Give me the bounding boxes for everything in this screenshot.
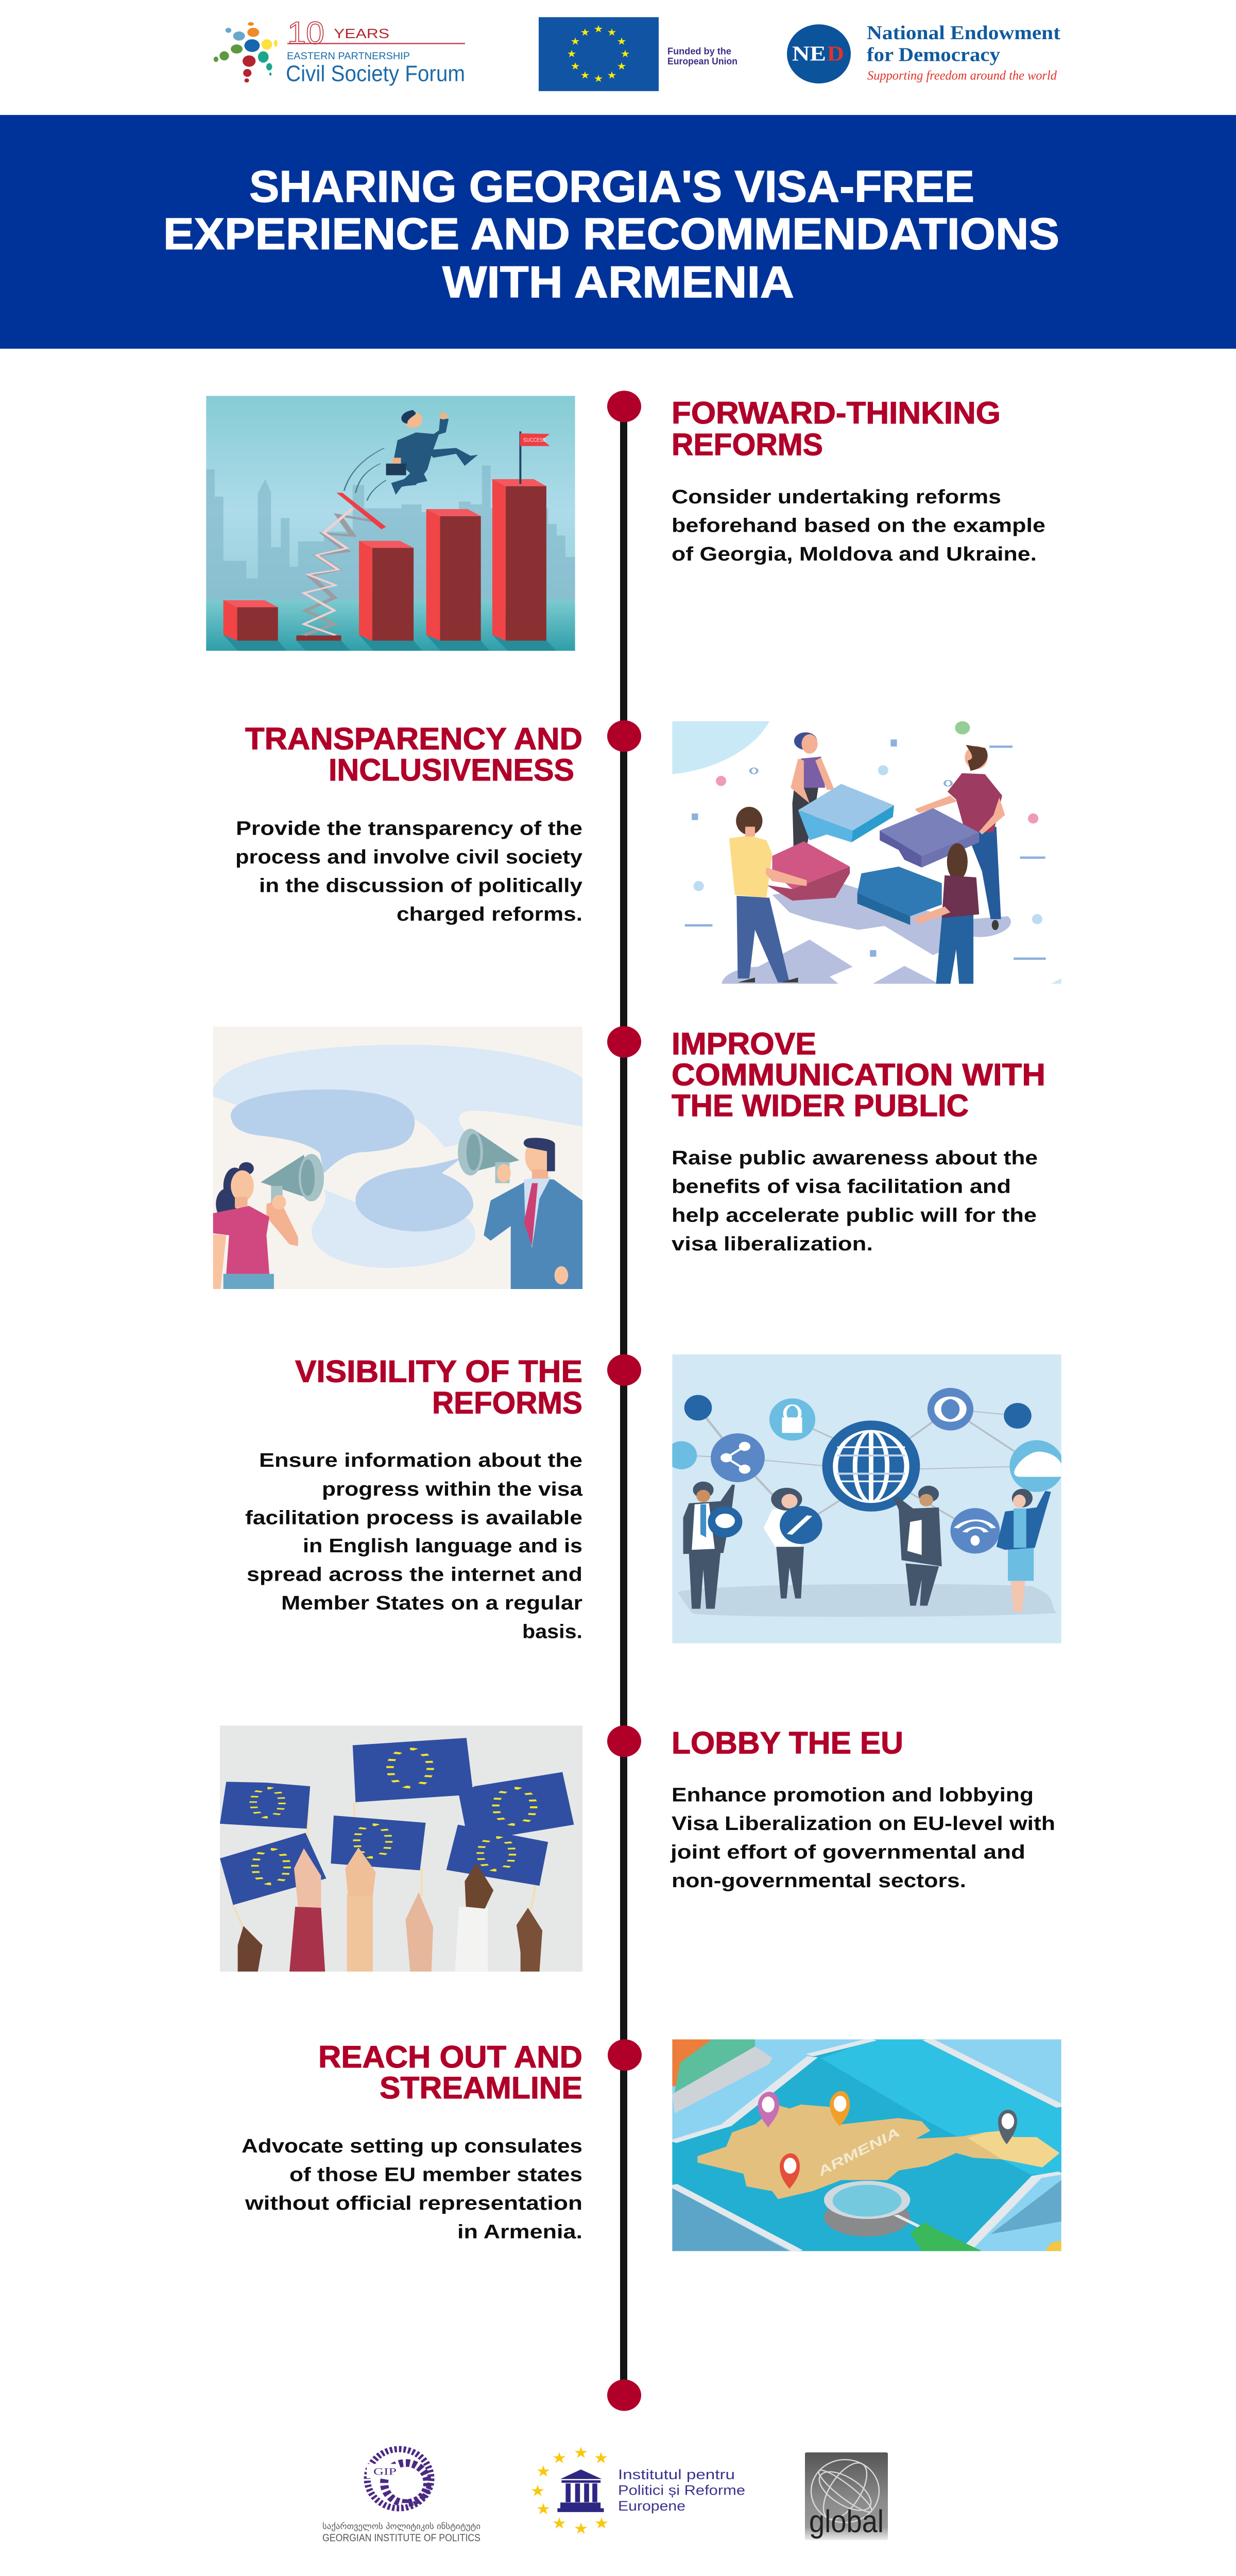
title banner bbox=[0, 115, 1236, 349]
text block: spread across the internet and bbox=[247, 1564, 582, 1585]
footer logos bbox=[322, 2447, 888, 2544]
logo: EaP Civil Society Forum 10 years: EASTERN PARTNERSHIP bbox=[287, 50, 410, 62]
text block: of Georgia, Moldova and Ukraine. bbox=[672, 543, 1037, 565]
text block: non-governmental sectors. bbox=[672, 1870, 966, 1892]
text block: Provide the transparency of the bbox=[236, 818, 582, 839]
logo: Georgian Institute of Politics: საქართველოს პოლიტიკის ინსტიტუტი bbox=[322, 2521, 480, 2532]
text block: joint effort of governmental and bbox=[670, 1841, 1025, 1863]
heading: REACH OUT AND bbox=[318, 2040, 582, 2074]
heading bbox=[318, 2040, 582, 2106]
logo: EU flag funded by: European Union bbox=[667, 57, 737, 67]
logo: Institutul pentru Politici si Reforme Europene: Europene bbox=[618, 2498, 685, 2514]
panel: reach out and streamline bbox=[242, 2039, 1061, 2251]
logo: EaP Civil Society Forum 10 years: YEARS bbox=[334, 26, 389, 41]
logo: Institutul pentru Politici si Reforme Europene: Institutul pentru bbox=[618, 2467, 735, 2482]
heading: LOBBY THE EU bbox=[672, 1726, 903, 1760]
text block: of those EU member states bbox=[289, 2164, 582, 2185]
text block bbox=[670, 1784, 1055, 1892]
text block: progress within the visa bbox=[322, 1478, 583, 1500]
logo: Georgian Institute of Politics: GIP bbox=[373, 2467, 397, 2478]
text block: without official representation bbox=[245, 2192, 582, 2214]
illustration: businessman jumping up bar chart: SUCCESS bbox=[523, 437, 546, 443]
photo: raised hands with EU flags bbox=[220, 1725, 582, 1972]
text block: in English language and is bbox=[303, 1535, 582, 1557]
text block: benefits of visa facilitation and bbox=[672, 1176, 1011, 1197]
text block bbox=[672, 486, 1045, 565]
illustration: map of Armenia on phone: ARMENIA bbox=[814, 2125, 903, 2179]
heading: INCLUSIVENESS bbox=[329, 753, 574, 787]
heading: IMPROVE bbox=[672, 1026, 816, 1061]
text block bbox=[242, 2135, 582, 2243]
heading: REFORMS bbox=[672, 428, 823, 462]
logo: global: global bbox=[809, 2504, 884, 2539]
text block: Advocate setting up consulates bbox=[242, 2135, 582, 2157]
title: EXPERIENCE AND RECOMMENDATIONS bbox=[163, 209, 1059, 259]
text block: help accelerate public will for the bbox=[672, 1205, 1037, 1226]
panel: forward-thinking reforms bbox=[206, 396, 1045, 651]
text block: Visa Liberalization on EU-level with bbox=[672, 1812, 1055, 1834]
text block: process and involve civil society bbox=[235, 846, 582, 868]
title bbox=[163, 162, 1059, 307]
logo: National Endowment for Democracy: NE bbox=[792, 42, 826, 65]
logo: National Endowment for Democracy: Supporting freedom around the world bbox=[867, 69, 1057, 82]
logo: EU flag funded by: Funded by the bbox=[667, 46, 731, 57]
logo: Institutul pentru Politici si Reforme Europene: Politici și Reforme bbox=[618, 2483, 745, 2498]
logo: National Endowment for Democracy: D bbox=[827, 42, 844, 65]
text block: facilitation process is available bbox=[245, 1507, 582, 1529]
illustration: people holding network icons bbox=[666, 1354, 1063, 1643]
panel: transparency and inclusiveness bbox=[235, 721, 1061, 984]
heading: FORWARD-THINKING bbox=[672, 396, 1001, 431]
heading bbox=[672, 396, 1001, 462]
logo: EU flag funded by bbox=[539, 17, 737, 91]
text block: Ensure information about the bbox=[259, 1450, 582, 1471]
heading bbox=[672, 1026, 1045, 1123]
text block: Enhance promotion and lobbying bbox=[672, 1784, 1034, 1806]
logo: Georgian Institute of Politics bbox=[322, 2449, 480, 2544]
heading bbox=[295, 1354, 582, 1420]
logo: National Endowment for Democracy: for Democracy bbox=[867, 44, 1000, 65]
text block: in Armenia. bbox=[457, 2221, 582, 2243]
logo: EaP Civil Society Forum 10 years bbox=[214, 15, 465, 86]
logo: National Endowment for Democracy: National Endowment bbox=[867, 22, 1060, 44]
illustration: people assembling puzzle bbox=[672, 721, 1061, 984]
text block bbox=[245, 1450, 583, 1642]
text block: Raise public awareness about the bbox=[672, 1147, 1038, 1169]
heading bbox=[245, 722, 582, 787]
panel: lobby the EU bbox=[220, 1725, 1055, 1972]
heading: VISIBILITY OF THE bbox=[295, 1354, 582, 1389]
text block: visa liberalization. bbox=[672, 1233, 873, 1255]
text block: basis. bbox=[522, 1621, 582, 1642]
title: WITH ARMENIA bbox=[442, 257, 794, 307]
text block: in the discussion of politically bbox=[259, 875, 582, 896]
text block: beforehand based on the example bbox=[672, 515, 1045, 536]
logo: Georgian Institute of Politics: GEORGIAN INSTITUTE OF POLITICS bbox=[322, 2532, 480, 2544]
logo: EaP Civil Society Forum 10 years: 10 bbox=[287, 15, 324, 51]
heading: TRANSPARENCY AND bbox=[245, 722, 582, 756]
logo: Institutul pentru Politici si Reforme Europene bbox=[531, 2447, 745, 2534]
logo: global bbox=[805, 2452, 888, 2540]
heading: STREAMLINE bbox=[380, 2071, 582, 2106]
text block bbox=[235, 818, 582, 925]
text block bbox=[672, 1147, 1038, 1255]
header logos bbox=[214, 15, 1060, 91]
illustration: businessman jumping up bar chart bbox=[206, 396, 575, 651]
illustration: two people with megaphones bbox=[213, 1026, 582, 1289]
text block: Member States on a regular bbox=[281, 1592, 582, 1614]
logo: EaP Civil Society Forum 10 years: Civil Society Forum bbox=[286, 61, 465, 86]
text block: Consider undertaking reforms bbox=[672, 486, 1001, 507]
heading: THE WIDER PUBLIC bbox=[672, 1089, 969, 1123]
panel: visibility of the reforms bbox=[245, 1354, 1063, 1643]
timeline bbox=[607, 391, 642, 2411]
logo: National Endowment for Democracy bbox=[787, 22, 1060, 83]
text block: charged reforms. bbox=[397, 903, 582, 925]
title: SHARING GEORGIA'S VISA-FREE bbox=[249, 162, 974, 211]
illustration: map of Armenia on phone bbox=[672, 2039, 1061, 2251]
heading: COMMUNICATION WITH bbox=[672, 1058, 1045, 1092]
panel: improve communication bbox=[213, 1026, 1045, 1289]
heading: REFORMS bbox=[432, 1386, 582, 1420]
